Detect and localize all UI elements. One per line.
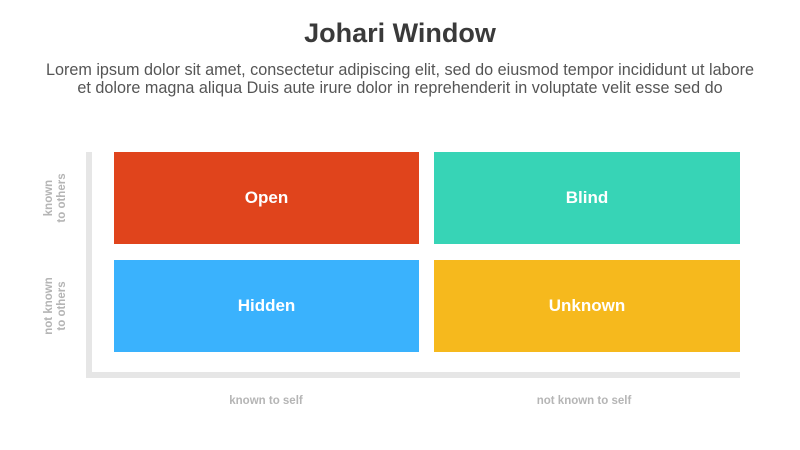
box: Open: Open (245, 188, 288, 207)
box: Unknown (434, 260, 740, 352)
label: not known to others: to others (56, 281, 68, 331)
box: Open (114, 152, 419, 244)
box: Unknown: Unknown (549, 296, 625, 315)
box: Hidden: Hidden (238, 296, 295, 315)
subtitle: Lorem ipsum dolor sit amet, consectetur adipiscing elit, sed do eiusmod tempor incididunt ut labore (46, 61, 754, 79)
label: known to others (43, 173, 68, 223)
subtitle (46, 61, 754, 96)
label: known to others: to others (56, 173, 68, 223)
label: known to self: known to self (229, 395, 303, 407)
label: not known to others (43, 277, 68, 335)
box: Blind (434, 152, 740, 244)
label: known to others: known (43, 180, 55, 216)
subtitle: et dolore magna aliqua Duis aute irure dolor in reprehenderit in voluptate velit esse sed do (77, 78, 723, 96)
label: not known to others: not known (43, 277, 55, 335)
box: Hidden (114, 260, 419, 352)
title: Johari Window (304, 18, 496, 48)
axis frame (86, 152, 92, 378)
label: not known to self: not known to self (537, 395, 631, 407)
box: Blind: Blind (566, 188, 608, 207)
